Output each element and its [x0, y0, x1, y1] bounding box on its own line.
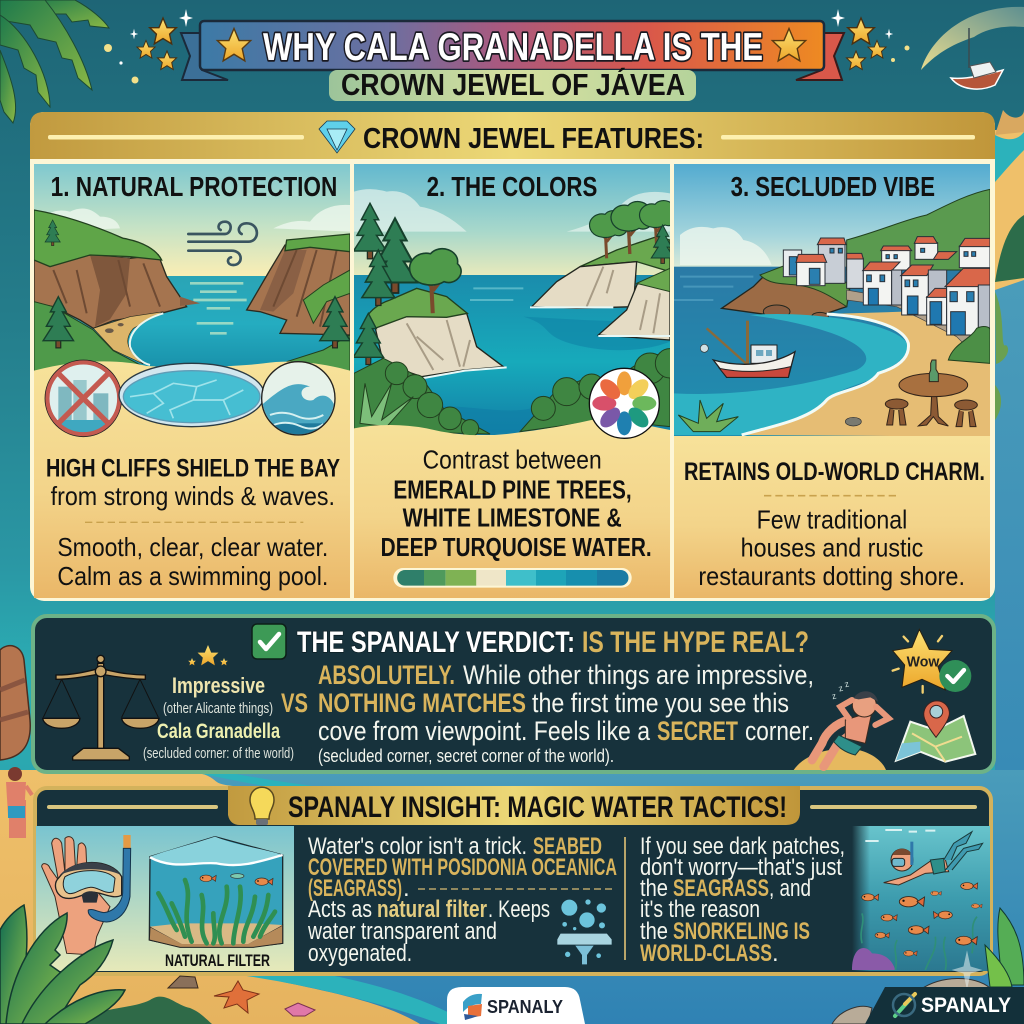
- icon: wave: [262, 362, 335, 437]
- insight left text: (SEAGRASS): [308, 875, 402, 902]
- illustration: relaxing man: z: [843, 678, 850, 689]
- column divider: [624, 837, 626, 960]
- text: emerald pine trees: EMERALD PINE TREES,: [393, 474, 632, 504]
- person on beach: [6, 767, 32, 838]
- insight right text: WORLD-CLASS: [640, 940, 772, 967]
- tag wordmark: SPANALY: [921, 994, 1011, 1017]
- beach: [742, 312, 990, 437]
- icon: diamond: [319, 121, 355, 153]
- icon: map with pin: [896, 701, 975, 762]
- text: strong winds: from strong winds & waves.: [51, 481, 335, 511]
- icon: bubbles and filter: [557, 899, 612, 964]
- logo mark: [463, 994, 482, 1020]
- leaves and rocks bottom right: [832, 908, 1024, 1024]
- label: other alicante things: (other Alicante things): [163, 700, 273, 717]
- card heading 2: 2. THE COLORS: [427, 171, 597, 202]
- insight frame: [35, 788, 991, 974]
- verdict question: IS THE HYPE REAL?: [582, 626, 809, 659]
- light illustration panel: [36, 826, 294, 971]
- insight heading: SPANALY INSIGHT: MAGIC WATER TACTICS!: [288, 791, 787, 824]
- card 1: natural protection: [34, 164, 350, 598]
- verdict body text: [318, 660, 814, 766]
- insight right text: [640, 833, 845, 967]
- insight right text: .: [772, 940, 779, 967]
- logo wordmark: SPANALY: [487, 997, 563, 1017]
- title ribbon: [181, 21, 844, 102]
- insight left text: SEABED: [533, 833, 602, 860]
- icon: wow star: [893, 629, 971, 693]
- subtitle pill: [329, 70, 696, 101]
- verdict body text: SECRET: [657, 716, 738, 746]
- text: deep turquoise water: DEEP TURQUOISE WATER.: [381, 532, 652, 562]
- insight left text: natural filter: [377, 896, 487, 923]
- label: cala granadella: Cala Granadella: [157, 720, 280, 743]
- insight left text: water transparent and: [307, 918, 497, 945]
- verdict body text: While other things are impressive,: [463, 660, 814, 690]
- sail and boat top right: [921, 7, 1024, 89]
- headland: [720, 277, 850, 316]
- right clifftops: [580, 237, 670, 272]
- illustration: snorkeler and fish: [852, 826, 990, 971]
- icon: wow star: Wow: [907, 655, 940, 671]
- card 3: secluded vibe: [674, 164, 990, 598]
- tag icon: [893, 994, 915, 1016]
- illustration: relaxing man: z: [837, 683, 844, 694]
- title line one: WHY CALA GRANADELLA IS THE: [263, 26, 763, 69]
- card heading 3: 3. SECLUDED VIBE: [731, 171, 935, 202]
- label: natural filter: NATURAL FILTER: [165, 951, 270, 970]
- card heading 1: 1. NATURAL PROTECTION: [51, 171, 337, 202]
- features heading: CROWN JEWEL FEATURES:: [363, 123, 704, 155]
- panel frame: [30, 112, 995, 601]
- text: houses and rustic: houses and rustic: [741, 533, 923, 563]
- panel: spanaly verdict: [33, 616, 994, 772]
- panel: crown jewel features: [30, 112, 995, 601]
- decorative stars left: [104, 9, 193, 84]
- verdict body text: ABSOLUTELY.: [318, 660, 455, 690]
- insight right text: the: [640, 918, 668, 945]
- spanaly tag bottom right: [865, 987, 1024, 1024]
- beach table and stools: [885, 360, 977, 427]
- insight left text: COVERED WITH POSIDONIA OCEANICA: [308, 854, 617, 881]
- insight right text: SNORKELING IS: [673, 918, 810, 945]
- card 2: the colors: [353, 164, 685, 598]
- icon: three stars: [188, 645, 228, 665]
- insight right text: , and: [769, 875, 811, 902]
- text: smooth water: Smooth, clear, clear water.: [57, 532, 328, 562]
- insight right text: the: [640, 875, 668, 902]
- illustration: hand with mask and snorkel: [42, 835, 131, 955]
- icon: check box: [252, 624, 286, 659]
- icon: wind: [188, 222, 257, 265]
- verdict body text: NOTHING MATCHES: [318, 688, 526, 718]
- panel: spanaly insight: [35, 786, 991, 974]
- insight header band: [228, 786, 800, 825]
- icon: balance scale: [43, 655, 159, 760]
- palm fronds top left: [0, 0, 109, 123]
- label: secluded corner: (secluded corner: of the world): [143, 745, 294, 762]
- label: impressive: Impressive: [172, 673, 265, 698]
- ribbon stars: [217, 28, 806, 61]
- insight right text: it's the reason: [640, 896, 760, 923]
- verdict body text: corner.: [745, 716, 814, 746]
- text: calm pool: Calm as a swimming pool.: [57, 561, 328, 591]
- label: vs: VS: [281, 688, 308, 718]
- insight right text: If you see dark patches,: [640, 833, 845, 860]
- text: white limestone: WHITE LIMESTONE &: [403, 503, 622, 533]
- beach objects: [80, 976, 315, 1024]
- insight right text: SEAGRASS: [673, 875, 769, 902]
- text: contrast between: Contrast between: [423, 444, 602, 474]
- insight left text: Water's color isn't a trick.: [308, 833, 527, 860]
- verdict heading: THE SPANALY VERDICT:: [297, 626, 575, 659]
- shallow water: [674, 314, 908, 435]
- illustration: relaxing man: [794, 678, 889, 770]
- text: few traditional: Few traditional: [757, 504, 907, 534]
- large leaves bottom left: [0, 905, 125, 1024]
- verdict frame: [33, 616, 994, 772]
- icon: no cliffs: [45, 360, 122, 437]
- green hillside: [847, 189, 990, 270]
- colour swatch bar: [393, 568, 632, 588]
- spanaly logo centre: [447, 987, 585, 1024]
- houses: [783, 237, 990, 335]
- header band: [30, 112, 995, 159]
- illustration: relaxing man: z: [831, 690, 837, 701]
- insight left text: [307, 833, 617, 967]
- insight right text: don't worry—that's just: [640, 854, 842, 881]
- insight left text: . Keeps: [488, 896, 550, 923]
- right cliff: [247, 240, 350, 335]
- insight left text: Acts as: [308, 896, 372, 923]
- illustration: seagrass filter tank: [149, 837, 283, 947]
- fishing boat: [700, 321, 795, 377]
- icon: colour wheel: [589, 368, 659, 438]
- insight left text: oxygenated.: [308, 940, 412, 967]
- verdict body text: cove from viewpoint. Feels like a: [318, 716, 651, 746]
- left cliff: [34, 255, 187, 328]
- text: high cliffs: HIGH CLIFFS SHIELD THE BAY: [46, 455, 340, 483]
- icon: light bulb: [250, 787, 274, 825]
- ribbon shape: [181, 21, 844, 80]
- verdict body text: the first time you see this: [532, 688, 789, 718]
- insight left text: .: [403, 875, 410, 902]
- icon: swimming pool: [119, 363, 264, 427]
- decorative stars right: [831, 9, 910, 70]
- text: restaurants: restaurants dotting shore.: [698, 561, 965, 591]
- verdict body text: (secluded corner, secret corner of the world).: [318, 746, 614, 766]
- title line two: CROWN JEWEL OF JÁVEA: [341, 67, 685, 102]
- left cliff: [375, 313, 503, 377]
